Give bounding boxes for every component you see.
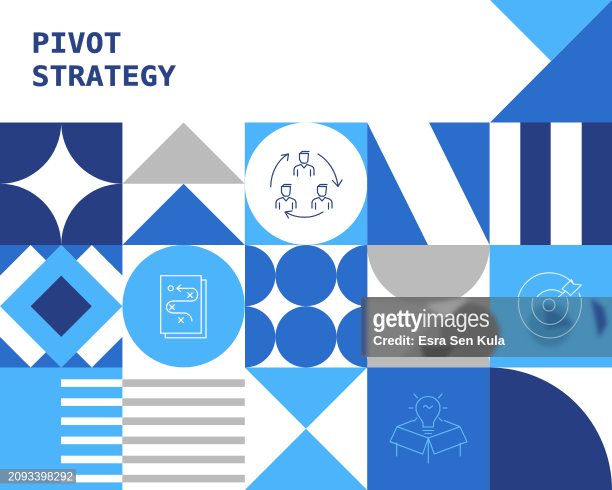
icon: lightbulb in open box xyxy=(390,394,467,463)
icon: team with rotating arrows xyxy=(271,152,342,218)
watermark logo: Credit: Esra Sen Kula xyxy=(373,333,506,348)
icon: target with arrow xyxy=(517,273,582,337)
panel: navy quarter circle tile xyxy=(490,368,612,490)
panel: slanted triangles tile xyxy=(367,122,490,245)
panel: idea box tile xyxy=(367,368,490,490)
panel: stacked triangles tile xyxy=(122,122,245,245)
watermark band xyxy=(361,297,612,357)
panel: diamond tile xyxy=(0,245,122,368)
panel: gray horizontal stripes tile xyxy=(122,379,245,482)
panel: navy star tile xyxy=(0,122,122,245)
panel: playbook tile xyxy=(122,245,245,367)
panel: left horizontal stripes tile xyxy=(0,368,122,490)
watermark logo xyxy=(372,305,506,348)
panel: team rotation tile xyxy=(245,122,367,245)
panel: vertical stripes tile xyxy=(520,122,612,245)
icon: strategy playbook xyxy=(161,276,206,338)
panel: gray semicircles tile xyxy=(367,245,490,368)
panel: top right triangles xyxy=(490,0,612,122)
panel: hourglass triangles tile xyxy=(245,368,367,490)
title xyxy=(32,26,176,92)
watermark logo: gettyimages xyxy=(372,305,489,332)
title: STRATEGY xyxy=(32,59,176,92)
title: PIVOT xyxy=(32,26,122,59)
image id tag: 2093398292 xyxy=(8,470,73,484)
panel: target tile xyxy=(490,245,612,368)
panel: circles tile xyxy=(245,245,368,368)
